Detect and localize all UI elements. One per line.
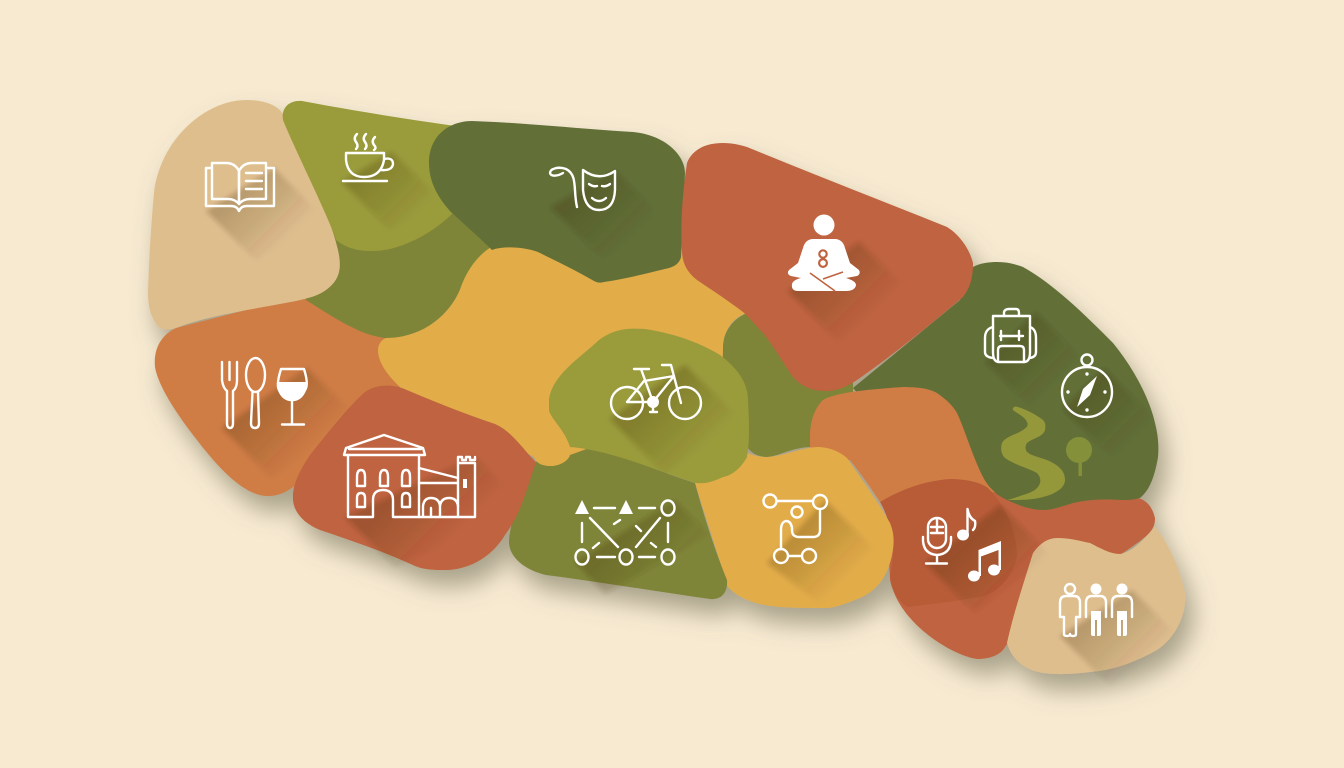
blob: outdoors dark green	[853, 262, 1158, 510]
icon: route nodes	[764, 494, 880, 605]
icon: backpack	[985, 309, 1082, 408]
icon: open book	[206, 163, 324, 261]
icon: network diagram	[575, 500, 710, 594]
blob: people tan	[1007, 527, 1185, 674]
icon: three people	[1060, 584, 1182, 686]
blob: lower olive	[300, 160, 510, 338]
icon: compass	[1062, 354, 1154, 459]
blob: food orange	[155, 295, 400, 496]
icon: historic building	[344, 435, 525, 567]
blob: centre orange	[810, 387, 995, 502]
blob map	[148, 100, 1185, 674]
blob: music dark overlay	[880, 479, 1017, 607]
blob: bicycle olive	[549, 329, 749, 483]
blob: middle olive	[720, 313, 853, 460]
icon: coffee cup	[342, 134, 440, 230]
blob: coffee olive	[283, 101, 470, 251]
blob: network olive	[509, 440, 727, 599]
icon: tree	[1066, 437, 1092, 476]
icon: theatre mask	[550, 168, 668, 260]
blob: heritage terracotta	[293, 386, 536, 570]
blob: route yellow	[695, 447, 894, 608]
blob: music terracotta	[889, 477, 1155, 659]
blob: central yellow	[378, 240, 747, 466]
blob: reading tan	[148, 100, 340, 329]
icon: microphone and music notes	[923, 505, 1050, 613]
icon: winding river	[1001, 407, 1065, 500]
icon: bicycle	[610, 365, 740, 474]
icon: fork, spoon and wine glass	[222, 358, 357, 478]
blob: meditation terracotta	[681, 143, 973, 391]
icon: meditating figure	[788, 214, 909, 341]
blob: theatre dark green	[429, 121, 685, 283]
